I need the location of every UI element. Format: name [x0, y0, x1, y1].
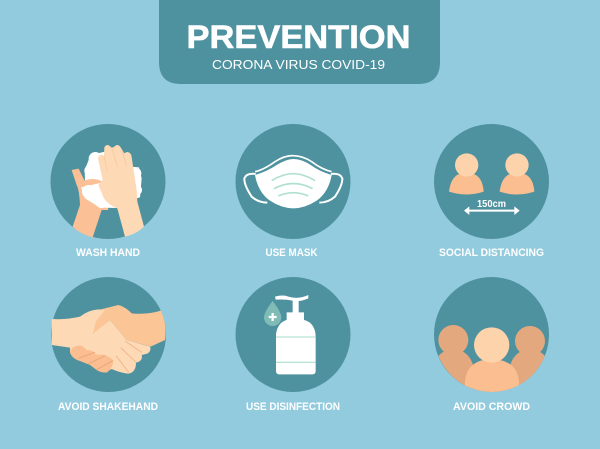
circle: social distancing — [434, 124, 549, 239]
panel: avoid crowd — [433, 277, 551, 413]
icon: crowd — [438, 325, 545, 392]
panel: use mask — [236, 124, 350, 259]
distance text: 150cm — [477, 199, 506, 210]
circle: avoid shakehand — [51, 277, 166, 392]
icon: two people — [449, 153, 534, 215]
panel: wash hand — [50, 124, 166, 259]
icon: face mask — [244, 156, 342, 208]
circle: use mask — [236, 124, 350, 239]
circle: wash hand — [50, 124, 166, 239]
icon: handshake — [52, 305, 166, 374]
label: wash hand: WASH HAND — [76, 247, 140, 259]
circle: use disinfection — [236, 277, 350, 392]
title: PREVENTION — [186, 19, 410, 55]
header banner — [159, 0, 440, 84]
label: avoid shakehand: AVOID SHAKEHAND — [58, 401, 158, 413]
panel: use disinfection — [236, 277, 350, 413]
icon: pump bottle — [264, 295, 316, 374]
label: use disinfection: USE DISINFECTION — [246, 401, 340, 413]
panel: avoid shakehand — [51, 277, 166, 413]
panel: social distancing — [434, 124, 549, 259]
label: avoid crowd: AVOID CROWD — [453, 401, 530, 413]
label: social distancing: SOCIAL DISTANCING — [439, 247, 544, 259]
subtitle: CORONA VIRUS COVID-19 — [212, 57, 385, 72]
circle: avoid crowd — [434, 277, 549, 392]
icon: washing hands — [72, 145, 144, 237]
label: use mask: USE MASK — [266, 247, 318, 259]
